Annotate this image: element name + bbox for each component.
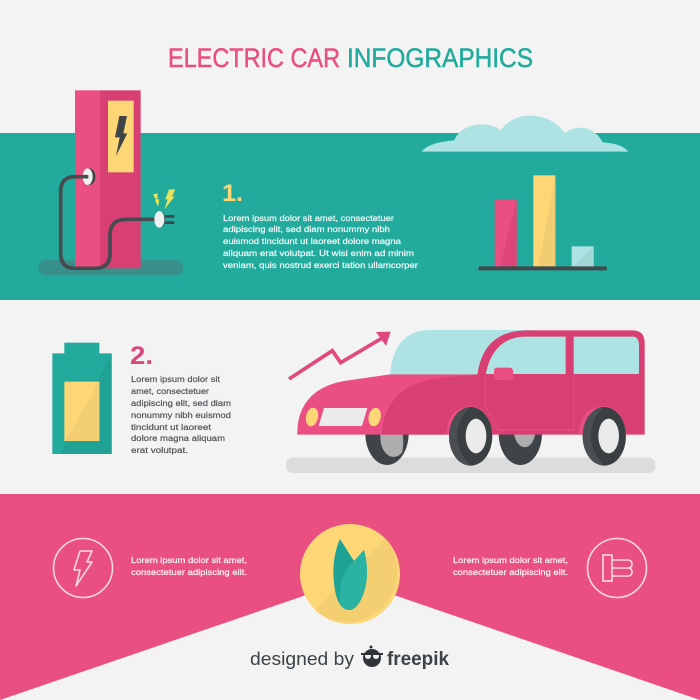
text block 2: erat volutpat.	[131, 445, 188, 455]
icon: freepik logo	[361, 646, 383, 667]
number 1: 1.	[222, 180, 243, 207]
text: right caption: consectetuer adipiscing elit.	[453, 567, 568, 577]
icon: leaf badge	[300, 524, 400, 624]
text block 1: euismod tincidunt ut laoreet dolore magna	[223, 236, 401, 246]
title: INFOGRAPHICS	[347, 43, 533, 73]
footer credit	[250, 646, 449, 670]
text: right caption: Lorem ipsum dolor sit amet,	[453, 555, 568, 565]
icon: battery	[52, 343, 112, 454]
title	[168, 43, 533, 73]
panel: pink footer band	[0, 494, 700, 700]
icon: cloud	[422, 116, 628, 152]
footer credit: designed by	[250, 648, 355, 669]
icon: charging station	[38, 90, 183, 275]
text block 1: adipiscing elit, sed diam nonummy nibh	[223, 224, 390, 234]
text: left caption	[131, 555, 247, 577]
text block 1: Lorem ipsum dolor sit amet, consectetuer	[223, 213, 394, 223]
illustration: car	[286, 330, 655, 473]
text block 1	[223, 213, 418, 270]
text block 2: amet, consectetuer	[131, 386, 209, 396]
text: right caption	[453, 555, 568, 577]
arrow: rising trend	[289, 332, 391, 379]
text block 1: aliquam erat volutpat. Ut wisi enim ad minim	[223, 248, 414, 258]
text block 2: nonummy nibh euismod	[131, 410, 231, 420]
text block 2: dolore magna aliquam	[131, 433, 225, 443]
text block 2: adipiscing elit, sed diam	[131, 398, 231, 408]
bar chart	[478, 175, 607, 270]
icon: lightning circle	[54, 538, 112, 598]
footer credit: freepik	[387, 649, 449, 670]
text: left caption: consectetuer adipiscing elit.	[131, 567, 247, 577]
text: left caption: Lorem ipsum dolor sit amet,	[131, 555, 247, 565]
text block 2: tincidunt ut laoreet	[131, 422, 212, 432]
text block 2	[131, 374, 231, 455]
text block 2: Lorem ipsum dolor sit	[131, 374, 221, 384]
title: ELECTRIC CAR	[168, 43, 340, 73]
icon: plug circle	[588, 538, 646, 598]
number 2: 2.	[130, 342, 153, 370]
text block 1: veniam, quis nostrud exerci tation ullamcorper	[223, 260, 418, 270]
panel: teal band	[0, 133, 700, 300]
